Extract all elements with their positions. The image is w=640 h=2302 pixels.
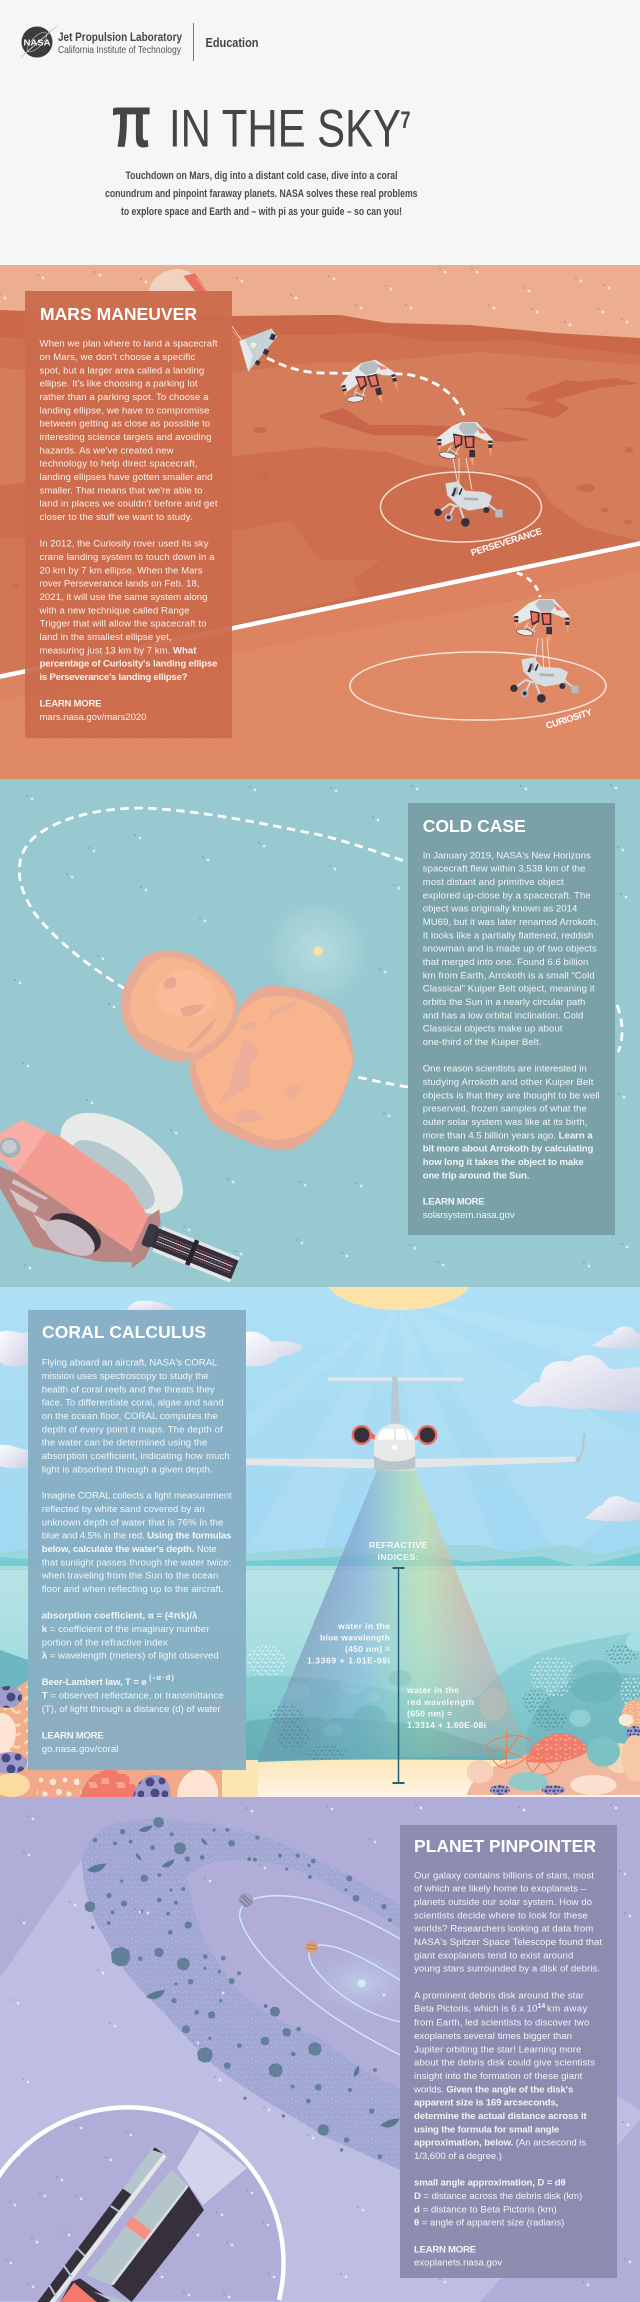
parachute <box>147 269 242 340</box>
text block: Cold Case body: It looks like a partially flattened, reddish <box>423 930 593 941</box>
text block: Cold Case body: and has a low orbital inclination. Cold <box>423 1010 583 1021</box>
heading: Mars Maneuver: MARS MANEUVER <box>40 304 197 324</box>
text block: Planet body: Jupiter orbiting the star! Learning more <box>414 2044 581 2055</box>
text block: Planet body: using the formula for small angle <box>414 2124 559 2135</box>
text block: Coral body: Flying aboard an aircraft, NASA's CORAL <box>42 1358 218 1369</box>
sand <box>0 1755 640 1797</box>
Mars craters <box>11 427 633 588</box>
text block: Planet body <box>413 1870 602 2269</box>
Mars sinuous dark feature <box>497 380 620 418</box>
reef on sand <box>467 1700 640 1795</box>
blue wavelength label: blue wavelength <box>320 1632 390 1642</box>
text block: Cold Case body: explored up-close by a spacecraft. The <box>423 890 591 901</box>
distant sun <box>256 889 380 1013</box>
text block: Mars body <box>38 339 218 723</box>
panel: Mars Maneuver <box>25 291 232 738</box>
refractive indices label <box>369 1540 427 1562</box>
Caltech name: California Institute of Technology <box>58 44 182 56</box>
text block: Cold Case body: that merged into one. Found 6.6 billion <box>423 957 588 968</box>
debris disk <box>82 1817 615 2235</box>
text block: Mars body: spot, but a larger area called a landing <box>40 365 204 376</box>
text block: Planet body: young stars surrounded by a disk of debris. <box>414 1964 600 1975</box>
telescope <box>37 2147 204 2302</box>
text block: Mars body: landing ellipse, we have to compromise <box>40 405 210 416</box>
orbit path <box>19 808 622 1087</box>
light cone from telescope <box>0 1855 640 2302</box>
text block: Cold Case body <box>423 850 600 1221</box>
intro text: conundrum and pinpoint faraway planets. NASA solves these real problems <box>105 188 418 200</box>
JPL name: Jet Propulsion Laboratory <box>58 32 183 44</box>
text block: Cold Case body: object was originally known as 2014 <box>423 904 578 915</box>
Perseverance landing ellipse <box>380 472 542 542</box>
glow around star <box>302 1943 422 2023</box>
Arrokoth <box>121 950 354 1150</box>
skycrane ropes and Curiosity <box>510 599 579 703</box>
telescope beam <box>177 2130 247 2205</box>
text block: Mars body: with a new technique called Range <box>38 605 190 616</box>
section: Mars Maneuver <box>0 265 640 800</box>
orbits <box>240 1896 413 2062</box>
lobe: Thule <box>121 950 237 1062</box>
depth bar <box>392 1568 404 1783</box>
text block: Cold Case body: LEARN MORE <box>423 1197 485 1208</box>
blue wavelength label: 1.3369 + 1.01E-09i <box>307 1656 390 1666</box>
fuselage <box>374 1424 415 1471</box>
reef left <box>0 1650 258 1797</box>
text block: Planet body: approximation, below. (An arcsecond is <box>414 2138 586 2149</box>
text block: Mars body: When we plan where to land a spacecraft <box>40 339 218 350</box>
skycrane ropes and Perseverance <box>434 422 503 527</box>
text block: Planet body: exoplanets.nasa.gov <box>414 2258 502 2269</box>
text block: Mars body: crane landing system to touch down in a <box>40 552 215 563</box>
text block: Coral body: when traveling from the Sun to the ocean <box>41 1571 218 1582</box>
text block: Cold Case body: km from Earth, Arrokoth is a small “Cold <box>423 970 595 981</box>
text block: Mars body: interesting science targets and avoiding <box>40 432 212 443</box>
refractive indices label: INDICES: <box>378 1552 419 1562</box>
text block: Mars body: ellipse. It's like choosing a parking lot <box>40 379 198 390</box>
disk inner clearing <box>187 1860 552 2162</box>
red wavelength label: (650 nm) = <box>407 1708 452 1718</box>
purple background <box>0 1797 640 2302</box>
Mars foreground <box>0 447 640 800</box>
text block: Mars body: rather than a parking spot. To choose a <box>40 392 209 403</box>
text block: Planet body: worlds? Researchers looking at data from <box>413 1924 593 1935</box>
section: Cold Case <box>0 779 640 1287</box>
New Horizons spacecraft <box>0 1093 240 1283</box>
Curiosity terrain halftone <box>0 543 640 779</box>
text block: Mars body: landing ellipses have gotten smaller and <box>40 472 212 483</box>
text block: Planet body: apparent size is 169 arcseconds, <box>414 2098 559 2109</box>
text block: Cold Case body: one-third of the Kuiper Belt. <box>423 1037 541 1048</box>
text block: Coral body: go.nasa.gov/coral <box>42 1744 118 1755</box>
planet: outer <box>239 1893 253 1907</box>
text block: Planet body: of which are likely home to exoplanets – <box>414 1884 587 1895</box>
text block: Coral body: (T), of light through a distance (d) of water <box>42 1704 221 1715</box>
text block: Coral body <box>41 1358 232 1755</box>
text block: Planet body: LEARN MORE <box>414 2244 477 2255</box>
clouds <box>0 1301 640 1521</box>
text block: Planet body: Beta Pictoris, which is 6 x 10 <box>414 2004 538 2015</box>
text block: Coral body: LEARN MORE <box>42 1731 104 1742</box>
intro text <box>105 170 418 218</box>
text block: Planet body: about the debris disk could give scientists <box>414 2058 595 2069</box>
purple stars <box>12 1804 632 2287</box>
sun <box>329 1287 469 1310</box>
title: IN THE SKY <box>169 100 401 158</box>
text block: Coral body: Imagine CORAL collects a light measurement <box>42 1491 232 1502</box>
text block: Cold Case body: most distant and primitive object <box>423 877 564 888</box>
text block: Mars body: rover Perseverance lands on Feb. 18, <box>40 579 200 590</box>
text block: Coral body: T = observed reflectance, or transmittance <box>42 1691 224 1702</box>
title: 7 <box>400 107 410 134</box>
text block: Coral body: health of coral reefs and the threats they <box>42 1384 215 1395</box>
red wavelength label: water in the <box>406 1685 459 1695</box>
text block: Coral body: (-α·d) <box>149 1673 174 1682</box>
text block: Coral body: absorption coefficient, indicating how much <box>42 1451 230 1462</box>
text block: Coral body: Beer-Lambert law, T = e <box>42 1677 147 1688</box>
text block: Mars body: LEARN MORE <box>40 699 102 710</box>
header background <box>0 0 640 265</box>
text block: Coral body: reflected by white sand covered by an <box>42 1504 205 1515</box>
section: Planet Pinpointer <box>0 1797 640 2302</box>
skycrane descending <box>336 356 403 412</box>
text block: Cold Case body: In January 2019, NASA's New Horizons <box>423 850 591 861</box>
text block: Planet body: D = distance across the debris disk (km) <box>414 2191 582 2202</box>
text block: Coral body: the water can be determined using the <box>42 1438 207 1449</box>
red wavelength label: red wavelength <box>407 1697 474 1707</box>
text block: Coral body: face. To differentiate coral, algae and sand <box>42 1398 224 1409</box>
text block: Cold Case body: more than 4.5 billion years ago. Learn a <box>423 1130 593 1141</box>
text block: Planet body: planets outside our solar system. How do <box>414 1897 592 1908</box>
logo: NASA JPL Education <box>21 23 258 61</box>
blue wavelength label: (450 nm) = <box>345 1644 390 1654</box>
panel: Coral Calculus <box>28 1310 246 1770</box>
text block: Coral body: floor and when reflecting up to the aircraft. <box>42 1584 224 1595</box>
text block: Coral body: below, calculate the water's depth. Note <box>42 1544 217 1555</box>
heading: Coral Calculus: CORAL CALCULUS <box>42 1322 206 1342</box>
text block: Cold Case body: spacecraft flew within 3,538 km of the <box>423 864 585 875</box>
title: π <box>112 80 151 163</box>
text block: Mars body: smaller. That means that we're able to <box>40 485 202 496</box>
text block: Coral body: absorption coefficient, α = (4πk)/λ <box>42 1611 198 1622</box>
text block: Cold Case body: bit more about Arrokoth by calculating <box>423 1144 594 1155</box>
text block: Mars body: on Mars, we don't choose a specific <box>40 352 195 363</box>
Curiosity landing ellipse <box>350 652 606 720</box>
white divider <box>0 543 640 677</box>
parachute and capsule <box>147 269 277 372</box>
text block: Planet body: scientists decide where to look for these <box>414 1910 588 1921</box>
text block: Cold Case body: outer solar system was like at its birth, <box>423 1117 587 1128</box>
text block: Coral body: depth of every point it maps. The depth of <box>42 1424 223 1435</box>
text block: Mars body: technology to help direct spacecraft, <box>40 459 198 470</box>
text block: Coral body: that sunlight passes through the water twice: <box>42 1557 231 1568</box>
text block: Mars body: 2021, it will use the same system along <box>40 592 208 603</box>
text block: Coral body: on the ocean floor, CORAL computes the <box>42 1411 218 1422</box>
text block: Coral body: mission uses spectroscopy to study the <box>42 1371 209 1382</box>
wings <box>245 1433 586 1468</box>
text block: Cold Case body: solarsystem.nasa.gov <box>423 1210 515 1221</box>
icon: NASA meatball <box>21 26 57 58</box>
ocean <box>0 1545 640 1767</box>
text block: Planet body: worlds. Given the angle of the disk's <box>413 2084 573 2095</box>
text block: Cold Case body: MU69, but it was later renamed Arrokoth. <box>423 917 599 928</box>
text block: Planet body: km away <box>547 2004 588 2015</box>
capsule <box>239 328 277 372</box>
Mars stars <box>0 268 629 327</box>
text block: Planet body: Our galaxy contains billions of stars, most <box>414 1870 594 1881</box>
text block: Coral body: light is absorbed through a given depth. <box>42 1464 213 1475</box>
panel: Planet Pinpointer <box>400 1825 617 2278</box>
text block: Planet body: giant exoplanets tend to exist around <box>414 1950 573 1961</box>
text block: Cold Case body: Classical objects make up about <box>423 1024 563 1035</box>
red wavelength label <box>406 1685 486 1730</box>
text block: Cold Case body: orbits the Sun in a nearly circular path <box>423 997 585 1008</box>
RTG <box>140 1221 240 1283</box>
text block: Cold Case body: one trip around the Sun. <box>423 1170 529 1181</box>
text block: Mars body: Trigger that will allow the spacecraft to <box>40 619 206 630</box>
intro text: to explore space and Earth and – with pi as your guide – so can you! <box>121 206 402 218</box>
text block: Mars body: land in places we couldn't before and get <box>40 499 218 510</box>
text block: Mars body: closer to the stuff we want to study. <box>40 512 192 523</box>
Mars ridge <box>320 408 530 442</box>
text block: Mars body: 20 km by 7 km ellipse. When the Mars <box>40 565 203 576</box>
teal background <box>0 779 640 1287</box>
text block: Coral body: portion of the refractive index <box>42 1637 168 1648</box>
text block: Cold Case body: Classical” Kuiper Belt object, meaning it <box>423 984 595 995</box>
text block: Planet body: insight into the formation of these giant <box>414 2071 583 2082</box>
tail <box>327 1375 463 1425</box>
blue wavelength label: water in the <box>337 1621 390 1631</box>
text block: Planet body: d = distance to Beta Pictoris (km) <box>414 2204 557 2215</box>
Mars sky <box>0 265 640 779</box>
text block: Mars body: is Perseverance's landing ellipse? <box>40 672 188 683</box>
telescope circle <box>0 2107 284 2302</box>
text block: Planet body: exoplanets several times bigger than <box>414 2031 572 2042</box>
text block: Mars body: land in the smallest ellipse yet, <box>40 632 172 643</box>
disk ring <box>82 1819 615 2235</box>
refractive indices label: REFRACTIVE <box>369 1540 427 1550</box>
engines <box>352 1425 437 1445</box>
aircraft <box>245 1375 586 1471</box>
high-gain dish <box>43 1093 200 1234</box>
text block: Mars body: percentage of Curiosity's landing ellipse <box>40 659 218 670</box>
sun rays <box>60 1300 640 1560</box>
lobe: Ultima <box>189 986 354 1150</box>
text block: Cold Case body: how long it takes the object to make <box>423 1157 584 1168</box>
landing path <box>267 358 540 597</box>
text block: Planet body: A prominent debris disk around the star <box>414 1990 585 2001</box>
red wavelength label: 1.3314 + 1.60E-08i <box>407 1720 486 1730</box>
Education label: Education <box>206 36 258 50</box>
text block: Planet body: θ = angle of apparent size (radians) <box>414 2218 564 2229</box>
panel: Cold Case <box>408 803 615 1235</box>
text block: Planet body: from Earth, led scientists to discover two <box>414 2018 589 2029</box>
text block: Coral body: blue and 4.5% in the red. Using the formulas <box>42 1531 231 1542</box>
teal stars <box>14 784 629 1270</box>
text block: Cold Case body: preserved, frozen samples of what the <box>423 1104 587 1115</box>
text block: Planet body: 1/3,600 of a degree.) <box>414 2151 502 2162</box>
title <box>112 80 410 163</box>
text block: Mars body: mars.nasa.gov/mars2020 <box>40 712 146 723</box>
label: Curiosity: CURIOSITY <box>544 706 594 731</box>
text block: Cold Case body: objects is that they are thought to be well <box>423 1090 600 1101</box>
Mars terrain layers <box>0 310 640 800</box>
body <box>0 1120 161 1268</box>
text block: Cold Case body: studying Arrokoth and other Kuiper Belt <box>423 1077 594 1088</box>
text block: Mars body: between getting as close as possible to <box>40 419 210 430</box>
icon: NASA meatball: NASA <box>24 38 51 48</box>
sky <box>0 1287 640 1557</box>
text block: Coral body: k = coefficient of the imaginary number <box>42 1624 210 1635</box>
teal reef <box>227 1632 640 1762</box>
central star <box>358 1979 366 1987</box>
heading: Planet Pinpointer: PLANET PINPOINTER <box>414 1836 596 1856</box>
blue wavelength label <box>307 1621 390 1666</box>
text block: Cold Case body: One reason scientists are interested in <box>423 1064 587 1075</box>
text block: Cold Case body: snowman and is made up of two objects <box>423 944 597 955</box>
planet: inner <box>306 1941 318 1953</box>
beam: spectrometer rainbow <box>257 1470 530 1760</box>
text block: Planet body: small angle approximation, D = dθ <box>414 2178 566 2189</box>
text block: Mars body: measuring just 13 km by 7 km. What <box>40 645 197 656</box>
text block: Planet body: NASA's Spitzer Space Telescope found that <box>414 1937 602 1948</box>
section: Coral Calculus <box>0 1287 640 1797</box>
text block: Planet body: 14 <box>538 2003 545 2010</box>
text block: Mars body: In 2012, the Curiosity rover used its sky <box>40 539 209 550</box>
label: Perseverance: PERSEVERANCE <box>469 525 543 558</box>
text block: Coral body: unknown depth of water that is 76% in the <box>42 1517 223 1528</box>
intro text: Touchdown on Mars, dig into a distant cold case, dive into a coral <box>126 170 398 182</box>
text block: Mars body: hazards. As we've created new <box>40 445 174 456</box>
circle stars <box>5 2124 276 2299</box>
rocks <box>85 1817 400 2159</box>
heading: Cold Case: COLD CASE <box>423 816 526 836</box>
text block: Coral body: λ = wavelength (meters) of light observed <box>42 1651 219 1662</box>
text block: Planet body: determine the actual distance across it <box>414 2111 587 2122</box>
